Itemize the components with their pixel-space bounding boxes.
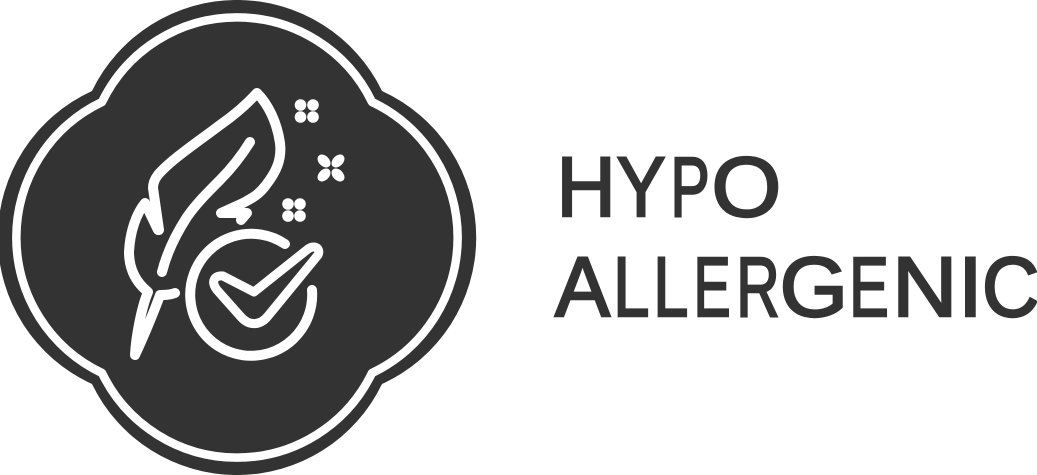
heading line: HYPO: Y — [617, 140, 666, 234]
heading line: ALLERGENIC: E — [849, 240, 889, 334]
heading line: ALLERGENIC: A — [555, 240, 610, 334]
heading line: HYPO: O — [712, 140, 781, 234]
heading line: HYPO: H — [556, 140, 616, 234]
heading line: ALLERGENIC: E — [694, 240, 731, 334]
heading line: ALLERGENIC: N — [892, 240, 957, 334]
heading line: ALLERGENIC: L — [653, 240, 688, 334]
heading line: ALLERGENIC: I — [958, 240, 983, 334]
icon: pollen particles — [282, 99, 347, 222]
heading line: ALLERGENIC: L — [613, 240, 649, 334]
badge: quatrefoil emblem — [0, 0, 476, 475]
heading line: ALLERGENIC: G — [780, 240, 848, 334]
heading: HYPO ALLERGENIC — [555, 140, 1037, 334]
icon: feather — [129, 93, 280, 355]
heading line: ALLERGENIC: R — [736, 240, 780, 334]
heading line: HYPO: P — [670, 140, 710, 234]
icon: check mark in circle — [190, 234, 319, 356]
